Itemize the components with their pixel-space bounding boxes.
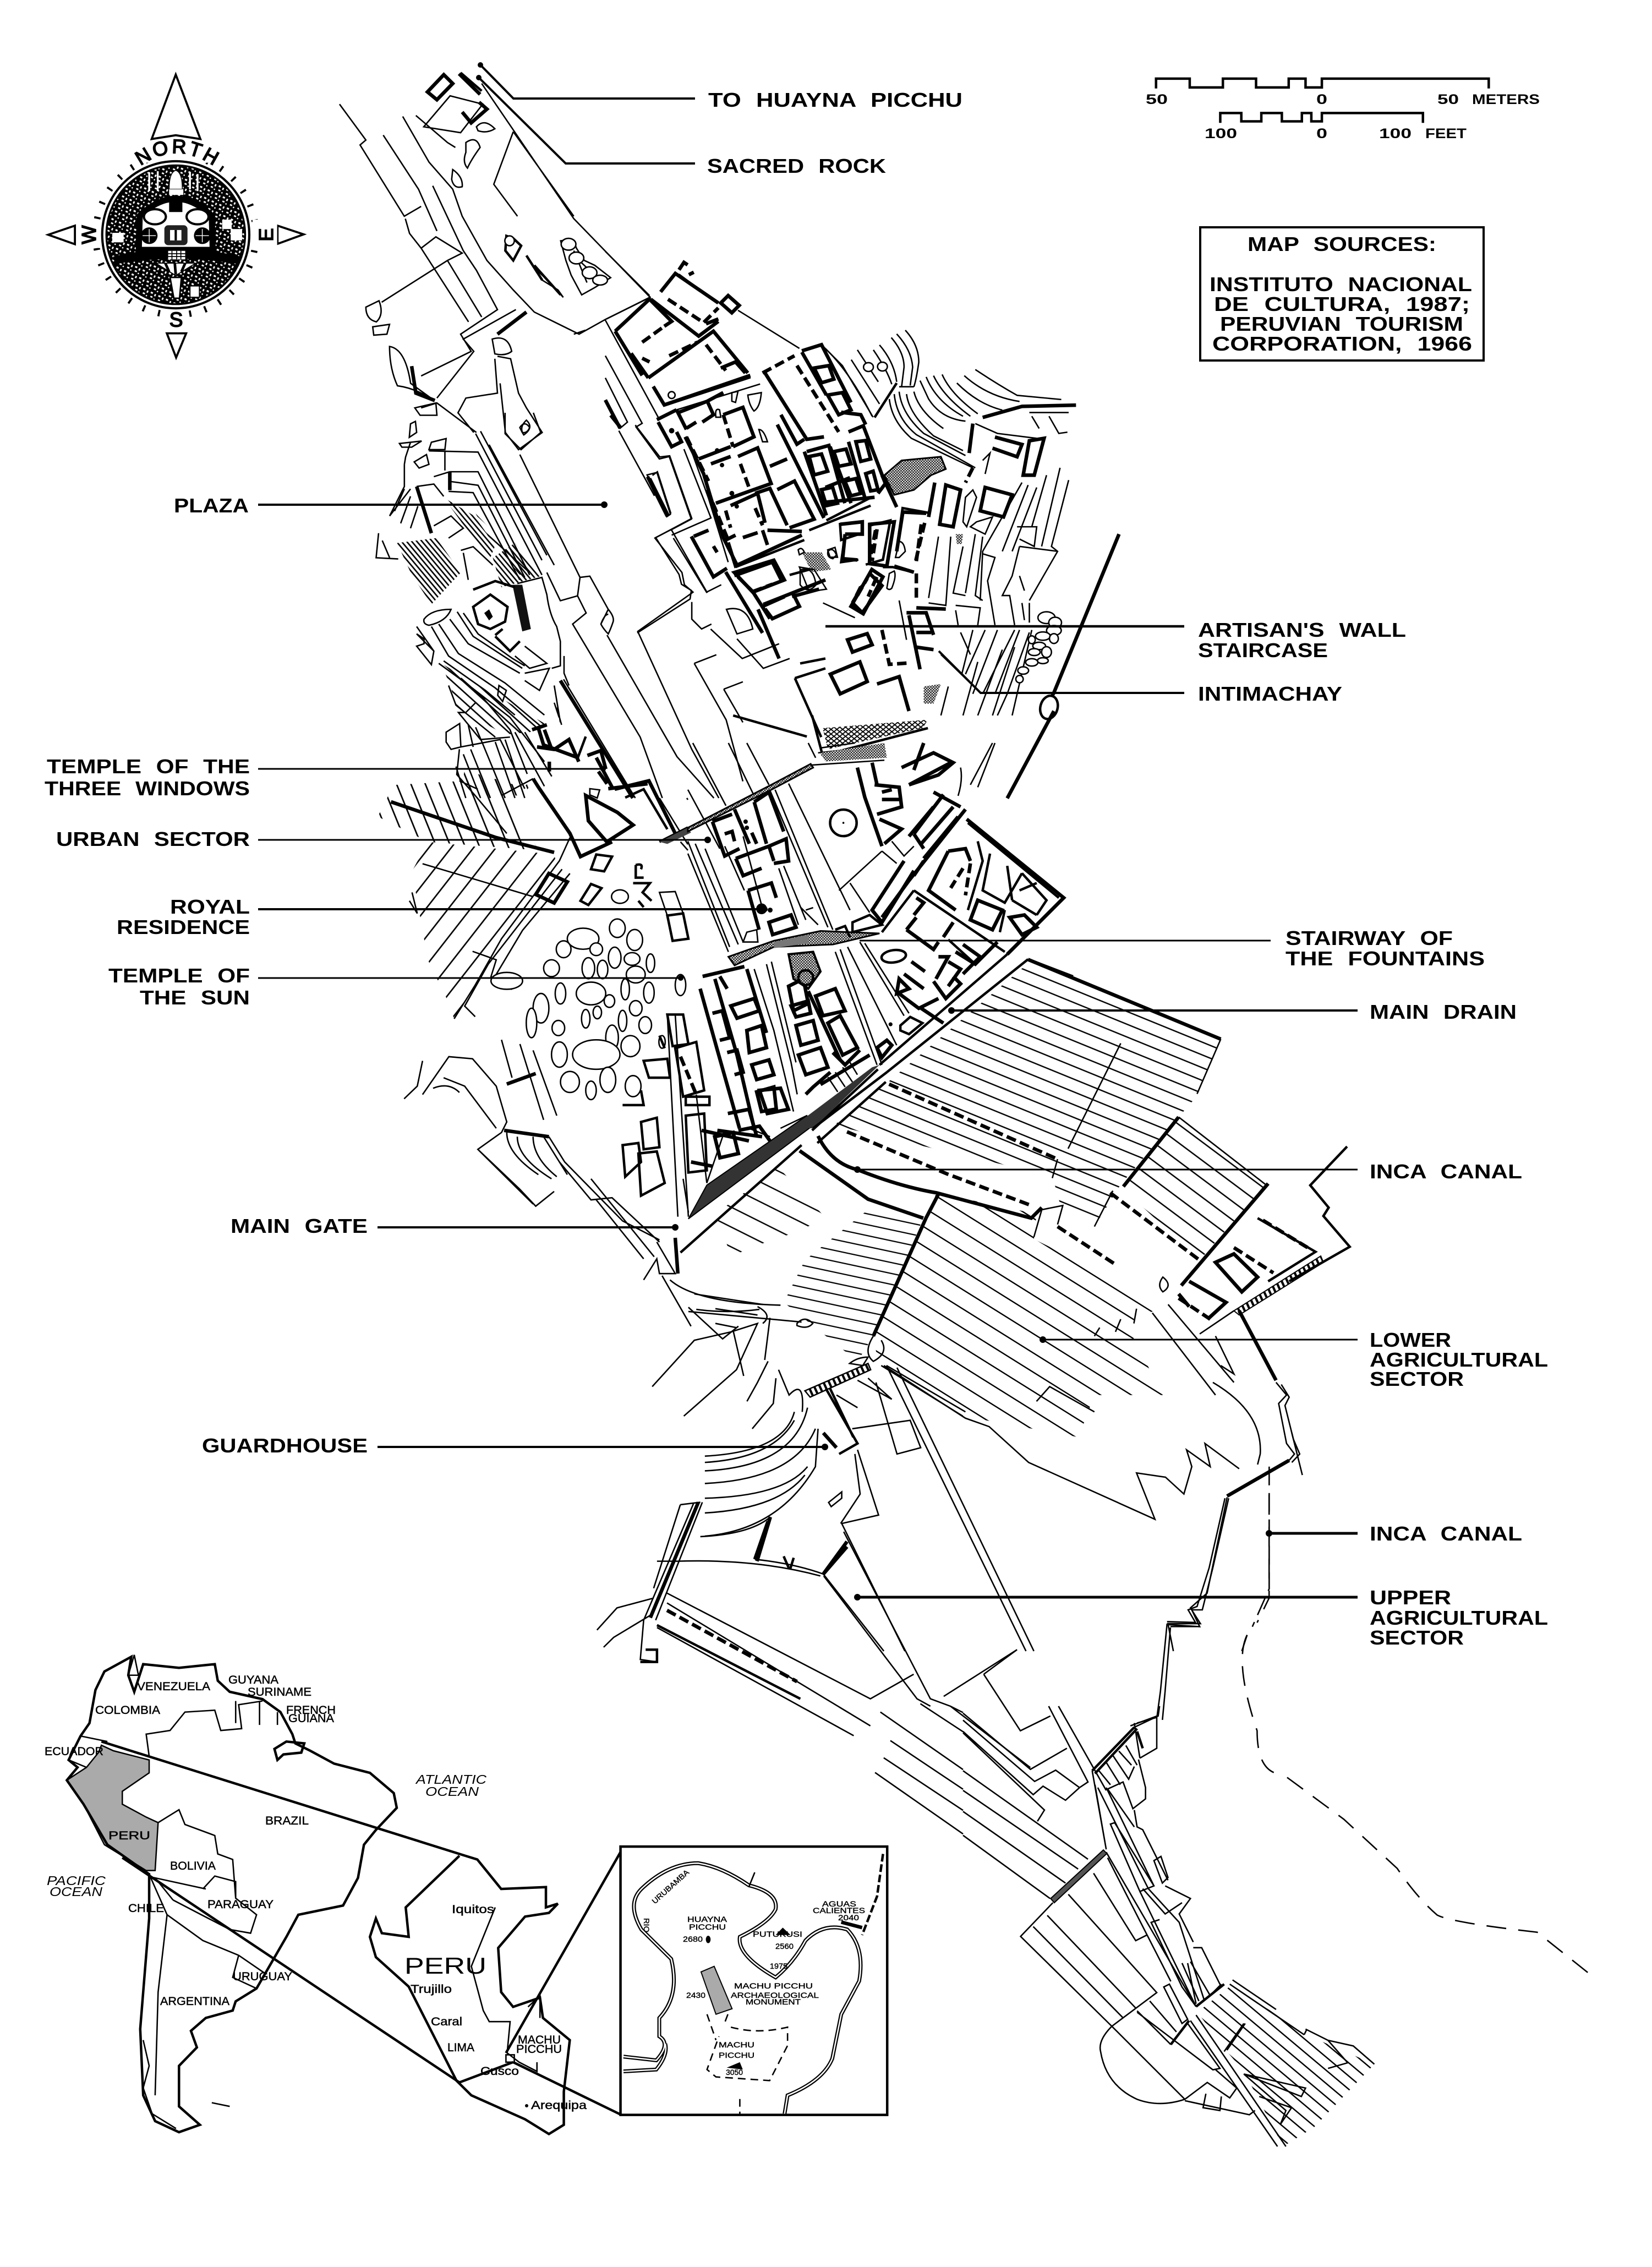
locator map: South America: FRENCH	[286, 1704, 336, 1717]
main drain west part	[688, 1116, 812, 1219]
locator map: South America: BOLIVIA	[170, 1860, 216, 1872]
upper curved building group	[872, 743, 965, 917]
label: upper agricultural sector: AGRICULTURAL	[1370, 1607, 1548, 1629]
label: urban sector	[56, 828, 711, 850]
locator map: South America	[45, 1655, 887, 2134]
locator map: South America: PACIFIC	[47, 1873, 106, 1888]
label: royal residence: RESIDENCE	[117, 916, 250, 938]
locator map: South America: GUIANA	[288, 1712, 334, 1725]
stairway of the fountains	[729, 931, 879, 965]
label: lower agricultural sector: SECTOR	[1370, 1368, 1464, 1390]
locator map: South America: CALIENTES	[813, 1906, 865, 1915]
label: upper agricultural sector: UPPER	[1370, 1586, 1451, 1609]
lower rooms	[700, 966, 869, 1128]
label: intimachay	[939, 651, 1342, 705]
scale bar in meters and feet: METERS	[1472, 92, 1540, 107]
label: lower agricultural sector: AGRICULTURAL	[1370, 1348, 1548, 1371]
label: stairway of the fountains: STAIRWAY OF	[1286, 927, 1453, 949]
label: royal residence	[117, 895, 768, 938]
locator map: South America: Caral	[431, 2015, 462, 2028]
locator map: South America: COLOMBIA	[95, 1704, 160, 1717]
lower buildings	[622, 1014, 709, 1195]
scale bar in meters and feet: 50	[1437, 92, 1459, 107]
label: plaza	[174, 494, 608, 517]
locator map: South America: RIO	[642, 1918, 651, 1932]
compass rose with Inca sun face: E	[255, 228, 277, 242]
locator map: South America: Arequipa	[531, 2099, 587, 2112]
site plan: northern entrance, sacred rock and upper walls	[340, 73, 825, 737]
scale bar in meters and feet: 50	[1146, 92, 1168, 107]
block A	[713, 792, 796, 935]
site plan: upper agricultural sector	[597, 1495, 1596, 1979]
locator map: South America: OCEAN	[425, 1784, 479, 1799]
label: guardhouse	[202, 1434, 828, 1457]
boulders	[491, 890, 686, 1100]
label: main gate	[231, 1215, 679, 1237]
locator map: South America: PERU	[404, 1953, 486, 1979]
ceremonial road band	[688, 764, 813, 832]
locator map: South America: Trujillo	[411, 1983, 452, 1996]
locator map: South America: PERU	[108, 1829, 150, 1842]
locator map: South America: AGUAS	[822, 1899, 856, 1908]
map sources box	[1200, 227, 1484, 360]
locator map: South America: PICCHU	[516, 2043, 562, 2056]
lower part of northern housing connection	[734, 560, 825, 658]
label: inca canal lower: INCA CANAL	[1370, 1522, 1522, 1545]
label: temple of the sun: TEMPLE OF	[108, 964, 250, 987]
locator map: South America: 2680	[683, 1935, 703, 1943]
site plan: western terraces below the plaza	[376, 413, 743, 798]
locator map: South America: HUAYNA	[687, 1915, 727, 1924]
label: artisan's wall staircase: STAIRCASE	[1198, 639, 1328, 662]
locator map: South America: 1975	[770, 1962, 787, 1970]
locator map: South America: 2430	[686, 1991, 705, 2000]
compass rose with Inca sun face	[45, 72, 307, 360]
label: temple of the sun: THE SUN	[140, 986, 250, 1009]
eastern block outline	[967, 819, 1064, 954]
label: artisan's wall staircase	[825, 619, 1406, 662]
locator map: South America: MACHU	[518, 2034, 561, 2046]
scale bar in meters and feet: FEET	[1425, 126, 1467, 141]
label: inca canal upper: INCA CANAL	[1370, 1160, 1522, 1183]
map sources box: MAP SOURCES:	[1248, 233, 1436, 255]
west cliff	[404, 1040, 659, 1259]
label: main gate: MAIN GATE	[231, 1215, 368, 1237]
locator map: South America: CHILE	[128, 1902, 164, 1915]
locator map: South America: 3050	[726, 2068, 743, 2077]
locator map: South America: ATLANTIC	[415, 1772, 486, 1787]
locator map: South America: VENEZUELA	[137, 1680, 210, 1693]
compass rose with Inca sun face: NORTH	[134, 139, 220, 166]
map sources box: INSTITUTO NACIONAL	[1210, 273, 1472, 296]
locator map: South America: SURINAME	[248, 1686, 311, 1698]
locator map: South America: 2040	[838, 1913, 859, 1922]
locator map: South America: MONUMENT	[746, 1997, 801, 2006]
locator map: South America: OCEAN	[50, 1884, 102, 1899]
locator map: South America: PUTUKUSI	[753, 1930, 802, 1938]
label: lower agricultural sector	[1040, 1329, 1548, 1390]
site plan: north-eastern terraces and Intimachay	[823, 330, 1119, 721]
locator map: South America: Cusco	[480, 2065, 519, 2078]
label: inca canal lower	[1266, 1522, 1522, 1545]
site plan: inca canal, lower agricultural sector and guardhouse	[652, 959, 1350, 1651]
scale bar in meters and feet: 100	[1379, 126, 1412, 141]
label: guardhouse: GUARDHOUSE	[202, 1434, 368, 1457]
locator map: South America: GUYANA	[228, 1674, 278, 1686]
map sources box: PERUVIAN TOURISM	[1220, 313, 1463, 335]
locator map: South America: MACHU PICCHU	[734, 1981, 813, 1990]
locator map: South America: URUBAMBA	[650, 1867, 691, 1905]
label: lower agricultural sector: LOWER	[1370, 1329, 1451, 1351]
scale bar in meters and feet: 0	[1316, 126, 1327, 141]
locator map: South America: BRAZIL	[265, 1815, 309, 1827]
locator map: South America: ARGENTINA	[160, 1995, 229, 2008]
site plan: central urban sector, sacred plaza circle, stairway of the fountains, eastern housing	[688, 711, 1073, 1128]
locator map: South America: 2560	[775, 1942, 794, 1951]
label: sacred rock	[476, 75, 886, 177]
label: main drain: MAIN DRAIN	[1370, 1001, 1517, 1023]
locator map: South America: LIMA	[447, 2041, 474, 2054]
label: urban sector: URBAN SECTOR	[56, 828, 250, 850]
main drain	[879, 954, 1073, 1072]
label: temple of the three windows: TEMPLE OF THE	[47, 755, 250, 778]
label: plaza: PLAZA	[174, 494, 249, 517]
locator map: South America: MACHU	[719, 2040, 754, 2049]
scale bar in meters and feet: 100	[1205, 126, 1237, 141]
compass rose with Inca sun face: S	[169, 308, 183, 331]
scale bar in meters and feet: 0	[1316, 92, 1327, 107]
locator map: South America: PICCHU	[719, 2051, 754, 2060]
label: royal residence: ROYAL	[170, 895, 250, 918]
locator map: South America: ECUADOR	[45, 1745, 103, 1758]
label: upper agricultural sector	[854, 1586, 1548, 1649]
label: upper agricultural sector: SECTOR	[1370, 1626, 1464, 1649]
locator map: South America: PARAGUAY	[207, 1898, 273, 1911]
scale bar in meters and feet	[1146, 79, 1540, 141]
label: sacred rock: SACRED ROCK	[707, 155, 886, 177]
locator map: South America: Iquitos	[452, 1903, 494, 1916]
label: temple of the three windows: THREE WINDOWS	[45, 777, 250, 800]
label: stairway of the fountains	[860, 927, 1485, 970]
map sources box: CORPORATION, 1966	[1212, 332, 1472, 355]
label: stairway of the fountains: THE FOUNTAINS	[1286, 947, 1485, 970]
label: main drain	[948, 1001, 1517, 1023]
label: to Huayna Picchu: TO HUAYNA PICCHU	[708, 89, 962, 111]
compass rose with Inca sun face: W	[78, 225, 100, 244]
label: temple of the sun	[108, 964, 683, 1009]
label: temple of the three windows	[45, 755, 606, 800]
site plan: central urban sector west, temple of the sun, main gate	[378, 715, 928, 1376]
locator map: South America: URUGUAY	[233, 1970, 292, 1983]
label: artisan's wall staircase: ARTISAN'S WALL	[1198, 619, 1406, 641]
locator map: South America: ARCHAEOLOGICAL	[731, 1991, 819, 2000]
locator map: South America: PICCHU	[689, 1922, 726, 1931]
label: inca canal upper	[854, 1160, 1522, 1183]
map sources box: DE CULTURA, 1987;	[1214, 293, 1470, 315]
label: intimachay: INTIMACHAY	[1198, 682, 1342, 705]
label: to Huayna Picchu	[478, 62, 962, 111]
site plan: northern housing block	[605, 252, 929, 633]
site plan: southern terraces fan and lower structure	[963, 1706, 1374, 2146]
